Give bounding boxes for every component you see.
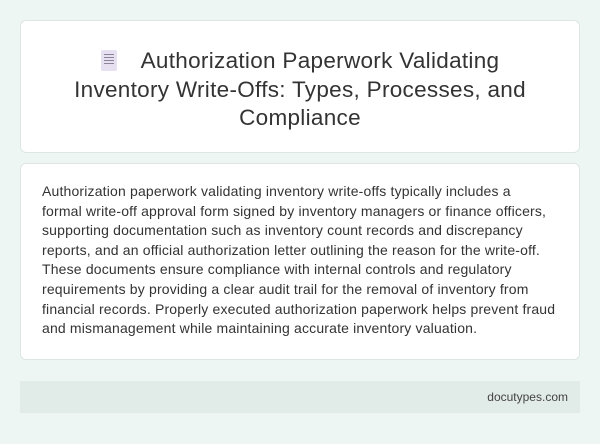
- icon: receipt document: [101, 50, 117, 71]
- title: [74, 48, 526, 130]
- text block: description: requirements by providing a clear audit trail for the removal of inventory from: [42, 281, 529, 297]
- text block: description: [42, 183, 555, 336]
- panel: title card: [20, 20, 580, 153]
- text block: description: These documents ensure compliance with internal controls and regulatory: [42, 261, 512, 277]
- footer bar: [20, 381, 580, 413]
- title: Inventory Write-Offs: Types, Processes, and: [74, 76, 526, 102]
- text block: description: reports, and an official authorization letter outlining the reason for the write-off.: [42, 242, 540, 258]
- title: Authorization Paperwork Validating: [141, 48, 499, 73]
- text block: description: supporting documentation such as inventory count records and discrepancy: [42, 222, 523, 238]
- text block: description: financial records. Properly executed authorization paperwork helps prevent fraud: [42, 301, 555, 317]
- text block: description: and mismanagement while maintaining accurate inventory valuation.: [42, 320, 477, 336]
- panel: description card: [20, 163, 580, 360]
- title: Compliance: [239, 105, 361, 130]
- text block: description: Authorization paperwork validating inventory write-offs typically includes a: [42, 183, 511, 199]
- footer text: source: docutypes.com: [487, 390, 568, 404]
- text block: description: formal write-off approval form signed by inventory managers or finance officers,: [42, 203, 546, 219]
